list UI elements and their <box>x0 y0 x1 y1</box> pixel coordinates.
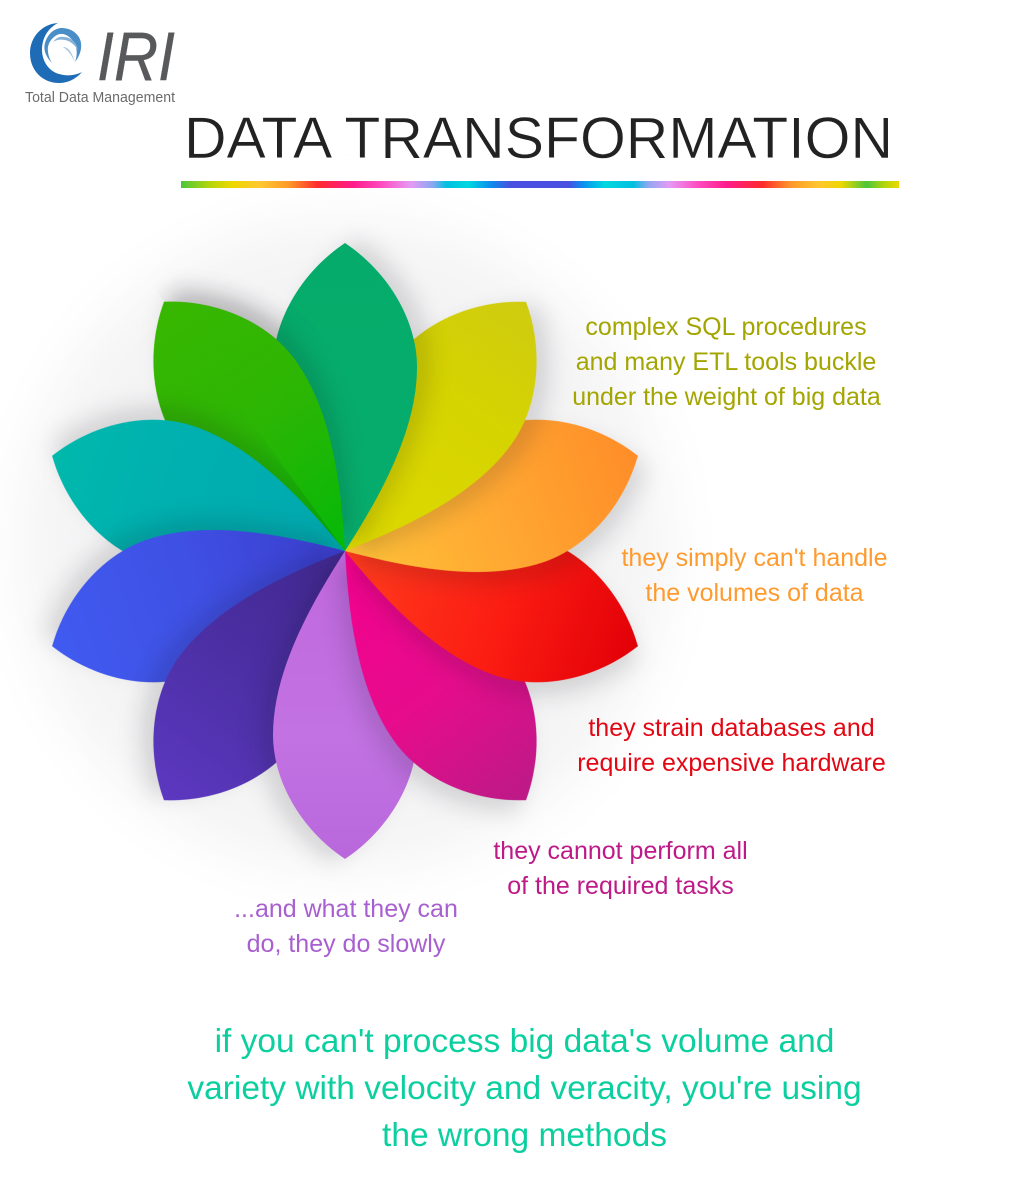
petal: green overlap completing the pinwheel <box>164 286 355 551</box>
logo: IRI Total Data Management <box>25 18 176 106</box>
callout: olive text: under the weight of big data <box>572 383 881 411</box>
callout: red text: they strain databases and <box>588 714 875 742</box>
closing statement <box>187 1023 862 1154</box>
callout: purple text <box>234 895 458 958</box>
closing statement: variety with velocity and veracity, you're using <box>187 1070 862 1107</box>
callout: purple text: do, they do slowly <box>247 930 446 958</box>
petal: magenta <box>287 509 584 842</box>
callout: olive text: complex SQL procedures <box>585 313 867 341</box>
closing statement: if you can't process big data's volume and <box>215 1023 834 1060</box>
callout: red text: require expensive hardware <box>577 749 886 777</box>
logo tagline: Total Data Management <box>25 89 176 106</box>
icon: blue swirl <box>30 23 82 83</box>
callout: orange text <box>621 544 888 607</box>
petal: green <box>106 260 403 593</box>
petal: indigo <box>106 509 403 842</box>
callout: magenta text: of the required tasks <box>507 872 734 900</box>
petal: blue <box>30 483 367 715</box>
callout: magenta text <box>493 837 748 900</box>
title: DATA TRANSFORMATION <box>184 106 893 171</box>
petal: lilac <box>273 551 417 859</box>
flower chart of ten petals <box>30 243 660 859</box>
callout: orange text: the volumes of data <box>645 579 864 607</box>
petal: orange <box>323 387 660 619</box>
callout: red text <box>577 714 886 777</box>
callout: olive text: and many ETL tools buckle <box>576 348 876 376</box>
callout: olive text <box>572 313 881 411</box>
callout: orange text: they simply can't handle <box>621 544 888 572</box>
petal: emerald <box>273 243 417 551</box>
callout: magenta text: they cannot perform all <box>493 837 748 865</box>
callout: purple text: ...and what they can <box>234 895 458 923</box>
petal: red <box>323 483 660 715</box>
petal: teal <box>30 387 367 619</box>
closing statement: the wrong methods <box>382 1117 667 1154</box>
logo wordmark: IRI <box>97 18 175 95</box>
petal: yellow <box>287 260 584 593</box>
rainbow divider bar <box>181 181 899 188</box>
